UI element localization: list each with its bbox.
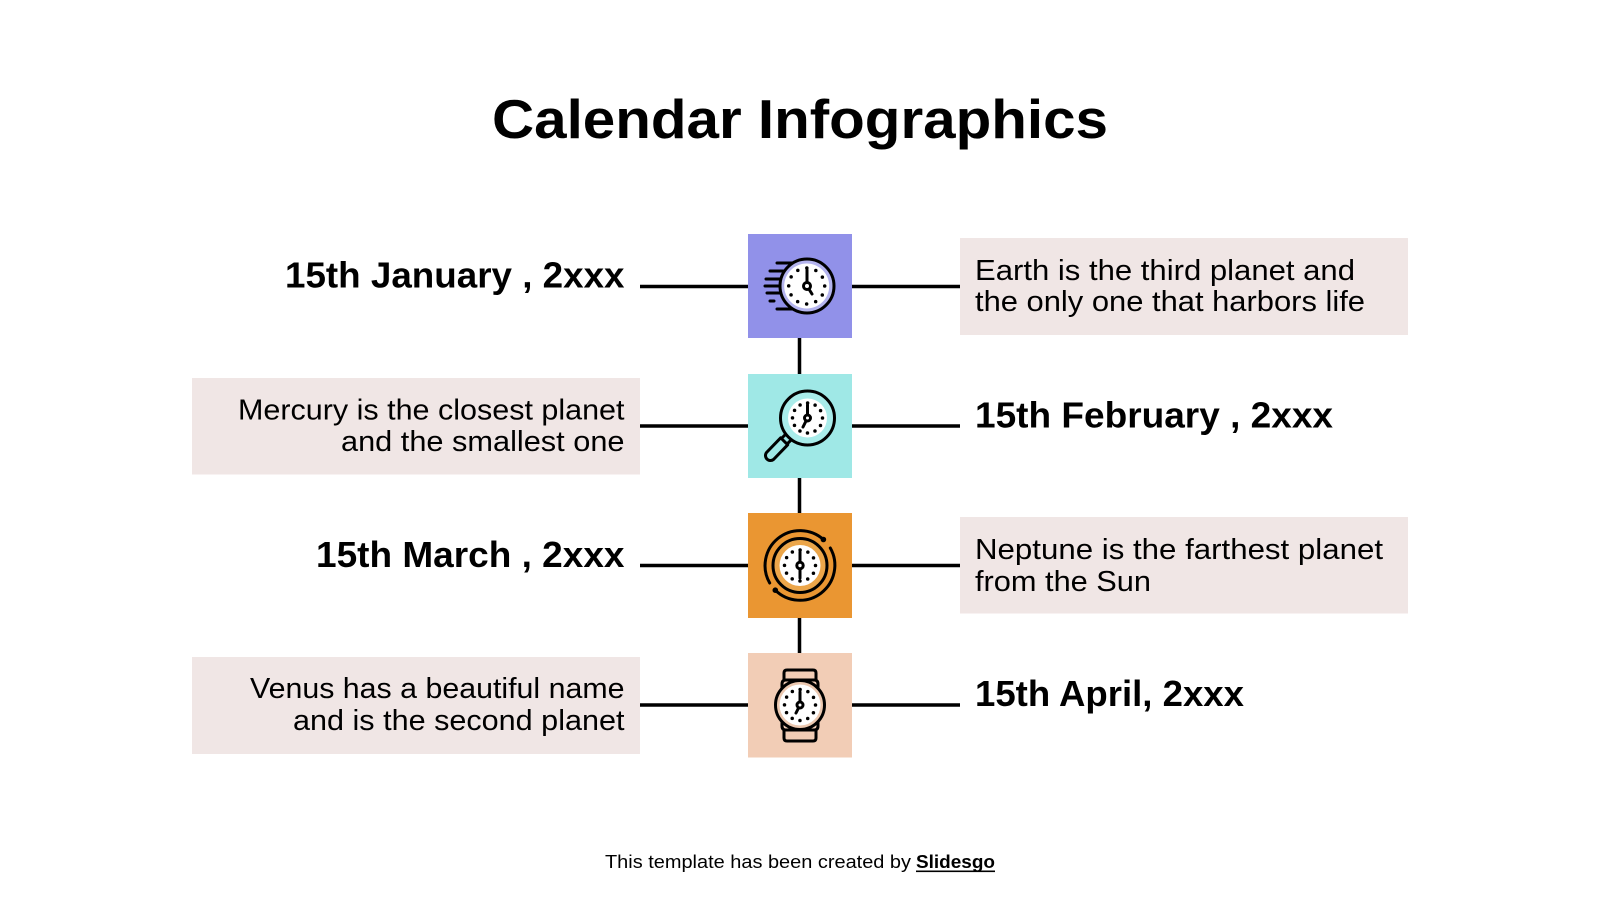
panel: Venus: and is the second planet	[293, 705, 625, 737]
panel: Neptune: Neptune is the farthest planet	[975, 534, 1383, 566]
date: 15th January: 15th January , 2xxx	[285, 254, 625, 296]
footer credit: This template has been created by	[605, 852, 911, 872]
icon tile: wristwatch	[748, 653, 852, 758]
panel: Venus: Venus has a beautiful name	[250, 673, 624, 705]
footer credit: Slidesgo	[916, 852, 995, 872]
row 2: February	[192, 374, 1334, 478]
panel: Earth: Earth is the third planet and	[975, 255, 1355, 287]
row 3: March	[316, 513, 1408, 618]
title: Calendar Infographics	[492, 88, 1108, 150]
panel: Neptune: from the Sun	[975, 566, 1151, 598]
row 4: April	[192, 653, 1245, 758]
icon tile: fast clock	[748, 234, 852, 338]
icon tile: rotating clock	[748, 513, 852, 618]
panel: Neptune	[960, 517, 1408, 614]
panel: Venus	[192, 657, 640, 754]
row 1: January	[285, 234, 1408, 338]
panel: Earth: the only one that harbors life	[975, 286, 1365, 318]
date: 15th February: 15th February , 2xxx	[975, 394, 1334, 436]
panel: Mercury	[192, 378, 640, 474]
date: 15th April: 15th April, 2xxx	[975, 673, 1245, 714]
connector lines	[640, 286, 960, 705]
panel: Mercury: Mercury is the closest planet	[238, 394, 625, 426]
date: 15th March: 15th March , 2xxx	[316, 534, 625, 575]
panel: Earth	[960, 238, 1408, 335]
icon tile: magnifier clock	[748, 374, 852, 478]
panel: Mercury: and the smallest one	[341, 426, 624, 458]
